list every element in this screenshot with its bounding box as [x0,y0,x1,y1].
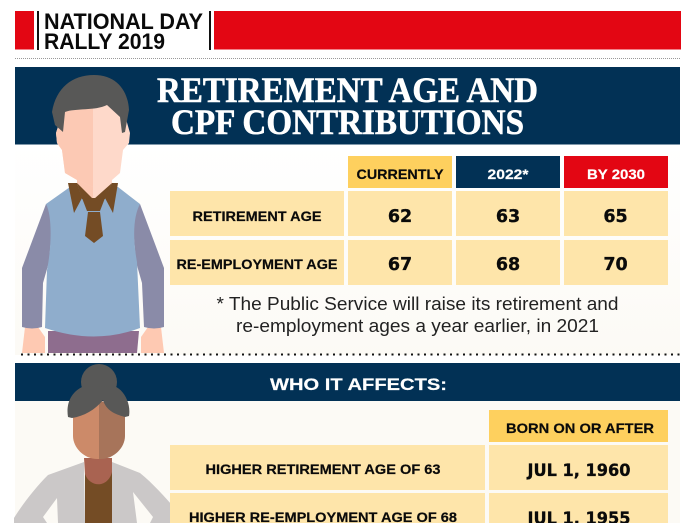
cardigan [14,462,85,523]
header bar: National Day Rally 2019: RALLY 2019 [44,29,165,54]
table: who it affects [170,410,668,523]
footnote: * The Public Service will raise its retirement and [216,294,618,314]
column header: born on or after: BORN ON OR AFTER [506,420,654,436]
head [56,105,130,187]
illustration: woman in cardigan [14,364,181,523]
banner: who it affects: WHO IT AFFECTS: [270,375,447,394]
row: higher retirement age [170,445,668,490]
row: re-employment age [170,240,668,285]
column header: by 2030: BY 2030 [587,166,645,182]
row: retirement age: 63 [496,207,520,227]
panel: who it affects background [15,401,680,523]
title banner: CPF CONTRIBUTIONS [171,102,524,142]
row: re-employment age: 68 [496,255,520,275]
sleeves [22,204,52,328]
row: retirement age: 62 [388,207,412,227]
column header: born on or after [489,410,668,442]
hair [52,75,129,133]
blouse [85,470,112,523]
row: re-employment age: 67 [388,255,412,275]
footnote [216,294,618,336]
column header: currently: CURRENTLY [356,166,444,182]
hair and bun [68,364,129,418]
panel: retirement age background [15,144,680,355]
hands [22,327,45,353]
row: higher re-employment age [170,493,668,523]
footnote: re-employment ages a year earlier, in 2021 [236,316,599,336]
face [73,400,99,459]
header bar: National Day Rally 2019: NATIONAL DAY [44,9,203,34]
row: retirement age [170,191,668,236]
row: re-employment age: 70 [603,255,628,275]
header bar: National Day Rally 2019 [15,9,681,54]
title banner [15,67,680,144]
column header: 2022: 2022* [488,166,529,182]
neck [84,458,112,484]
vest [45,187,140,336]
collar and tie [68,183,82,213]
row: re-employment age: RE-EMPLOYMENT AGE [176,257,338,272]
neck [77,172,112,204]
column header: by 2030 [564,156,668,188]
table: retirement ages [170,156,668,285]
row: retirement age: 65 [603,207,628,227]
column header: 2022 [456,156,560,188]
row: higher retirement age: HIGHER RETIREMENT AGE OF 63 [206,462,441,477]
row: retirement age: RETIREMENT AGE [192,209,322,224]
row: higher retirement age: JUL 1, 1960 [527,461,631,481]
trousers [48,331,139,353]
title banner: RETIREMENT AGE AND [157,70,538,110]
illustration: man in vest [22,75,164,353]
column header: currently [348,156,452,188]
banner: who it affects [15,363,680,401]
